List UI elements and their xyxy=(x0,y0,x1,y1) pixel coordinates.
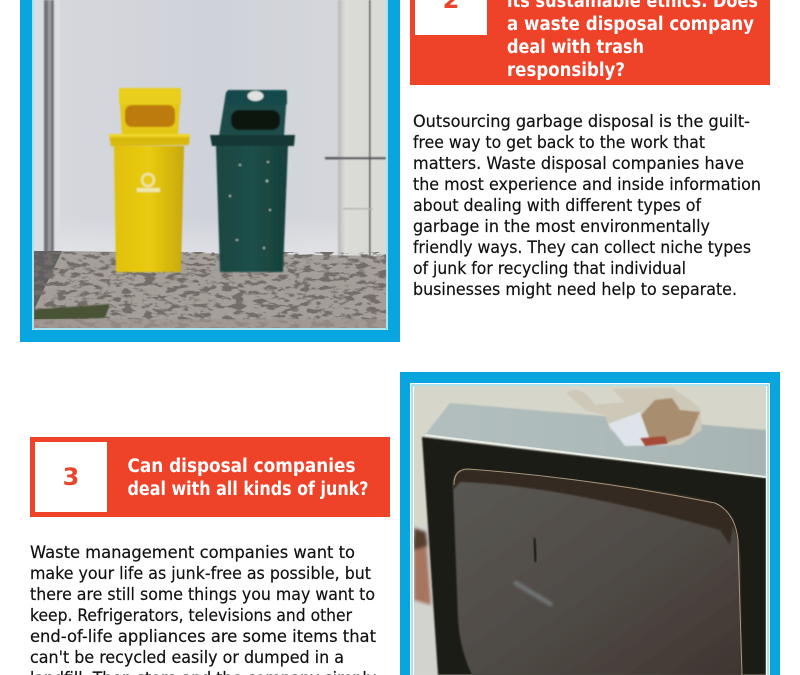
photo: yellow and green bins against a wall xyxy=(34,0,386,328)
heading text 2: a waste disposal company xyxy=(507,14,754,35)
photo: old discarded television xyxy=(414,386,766,675)
number 3: 3 xyxy=(63,463,79,491)
text block: answer 3: Waste management companies want to xyxy=(30,543,355,563)
text block: answer 2: businesses might need help to separate. xyxy=(413,280,737,300)
heading text 2 xyxy=(507,0,758,81)
text block: answer 3: there are still some things you may want to xyxy=(30,585,375,605)
heading panel 3 xyxy=(30,437,390,517)
text block: answer 3: keep. Refrigerators, televisions and other xyxy=(30,606,352,626)
heading text 3: Can disposal companies xyxy=(128,456,356,477)
panel: bins photo frame xyxy=(20,0,400,342)
debris on top of television xyxy=(566,388,702,446)
text block: answer 2: of junk for recycling that individual xyxy=(413,259,686,279)
text block: answer 2: about dealing with different types of xyxy=(413,196,702,216)
text block: answer 3: make your life as junk-free as possible, but xyxy=(30,564,371,584)
heading text 2: responsibly? xyxy=(507,60,625,81)
text block: answer 2: the most experience and inside information xyxy=(413,175,761,195)
text block: answer 3: can't be recycled easily or dumped in a xyxy=(30,648,344,668)
text block: answer 2: free way to get back to the work that xyxy=(413,133,705,153)
yellow bin xyxy=(109,88,190,272)
text block: answer 3 xyxy=(30,543,376,675)
text block: answer 2: Outsourcing garbage disposal is the guilt- xyxy=(413,112,750,132)
heading text 3: deal with all kinds of junk? xyxy=(128,479,368,500)
heading text 3 xyxy=(128,456,368,500)
text block: answer 3: end-of-life appliances are some items that xyxy=(30,627,376,647)
text block: answer 2: matters. Waste disposal companies have xyxy=(413,154,744,174)
cobblestone ground xyxy=(34,251,386,328)
panel: television photo frame xyxy=(400,372,780,675)
heading panel 2 xyxy=(410,0,770,85)
green bin xyxy=(210,90,295,272)
text block: answer 2 xyxy=(413,112,761,300)
heading text 2: deal with trash xyxy=(507,37,644,58)
text block: answer 2: garbage in the most environmentally xyxy=(413,217,710,237)
text block: answer 2: friendly ways. They can collect niche types xyxy=(413,238,751,258)
